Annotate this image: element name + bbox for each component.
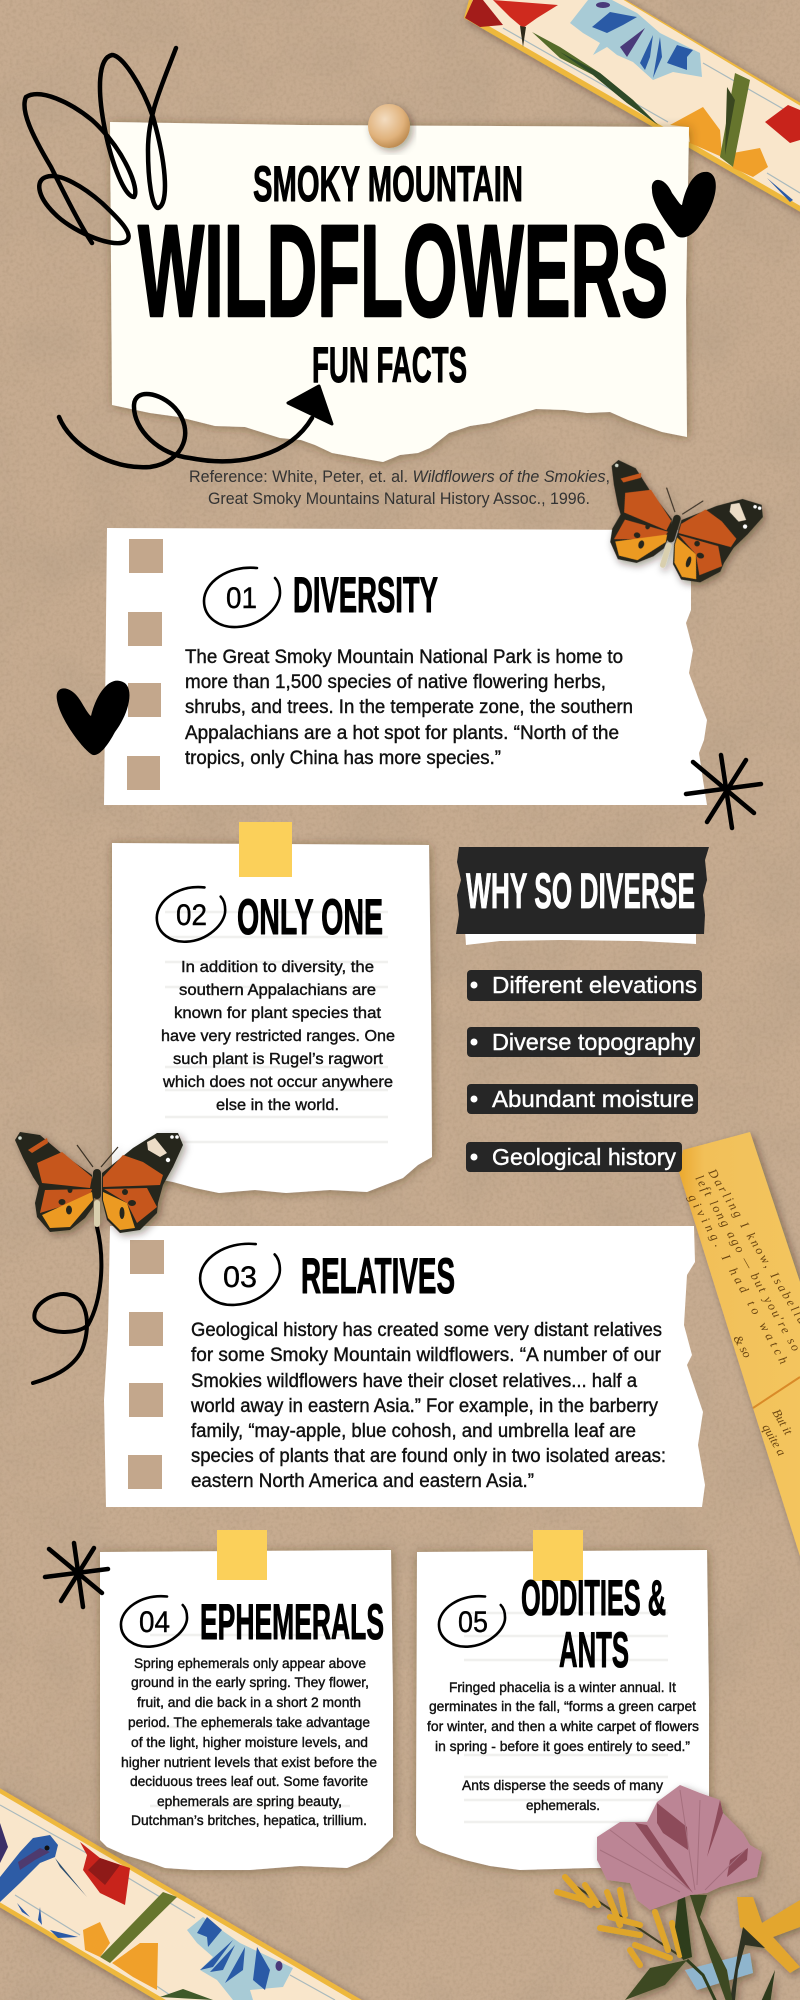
butterfly: top right [586, 459, 766, 597]
number badge 02 [157, 887, 225, 942]
panel: 02 only one [112, 822, 432, 1193]
title paper card [110, 122, 689, 462]
washi tape: top right floral [464, 0, 800, 214]
title: smoky mountain: SMOKY MOUNTAIN [253, 156, 523, 212]
body text 04: higher nutrient levels that exist before the [121, 1754, 377, 1770]
heading: ephemerals: EPHEMERALS [200, 1594, 384, 1650]
heading: only one: ONLY ONE [237, 889, 383, 945]
number badge 02: 02 [176, 899, 207, 932]
body text 04: of the light, higher moisture levels, and [131, 1734, 368, 1750]
arrow: looped arrow to fun facts [59, 386, 332, 467]
body text 01: Appalachians are a hot spot for plants. “North of the [185, 723, 619, 744]
heading: relatives: RELATIVES [301, 1248, 455, 1304]
number badge 04 [121, 1596, 187, 1647]
body text 01: shrubs, and trees. In the temperate zone, the southern [185, 697, 633, 718]
body text 04: ground in the early spring. They flower, [131, 1674, 369, 1690]
icon: asterisk left [45, 1543, 108, 1607]
yellow handwritten letter strip: giving. I had to watch [685, 1192, 791, 1366]
body text 03 [190, 1320, 666, 1492]
yellow handwritten letter strip: left long ago — but you're so [692, 1173, 800, 1354]
yellow note tab [533, 1530, 583, 1581]
reference citation line 2: Great Smoky Mountains Natural History Assoc., 1996. [208, 490, 590, 508]
body text 04: ephemerals are spring beauty, [157, 1793, 342, 1809]
body text 04: Dutchman’s britches, hepatica, trillium. [131, 1812, 367, 1828]
number badge 05 [439, 1596, 505, 1647]
number badge 01 [204, 568, 280, 627]
body text 02: southern Appalachians are [179, 982, 376, 999]
body text 05: Fringed phacelia is a winter annual. It [449, 1679, 676, 1695]
brass pin [368, 104, 410, 148]
botanical: pink flower bouquet [557, 1785, 800, 2000]
heading: ants: ANTS [559, 1622, 629, 1678]
bullet: different elevations: Different elevations [492, 972, 697, 998]
subtitle: fun facts: FUN FACTS [312, 337, 467, 393]
body text 02: In addition to diversity, the [181, 959, 374, 976]
body text 04 [121, 1655, 377, 1828]
number badge 05: 05 [458, 1606, 488, 1639]
body text 02: such plant is Rugel’s ragwort [173, 1051, 384, 1068]
body text 03: species of plants that are found only in two isolated areas: [191, 1446, 666, 1467]
icon: asterisk right [686, 755, 761, 828]
body text 01 [185, 647, 633, 769]
string from butterfly [33, 1227, 101, 1383]
yellow handwritten letter strip [679, 1132, 800, 1575]
body text 01: more than 1,500 species of native flowering herbs, [185, 672, 606, 693]
bullet: abundant moisture: Abundant moisture [492, 1086, 694, 1112]
panel: 01 diversity [104, 528, 707, 805]
body text 04: deciduous trees leaf out. Some favorite [130, 1773, 368, 1789]
body text 04: fruit, and die back in a short 2 month [137, 1694, 361, 1710]
body text 05: germinates in the fall, “forms a green carpet [429, 1698, 696, 1714]
body text 02: known for plant species that [174, 1005, 382, 1022]
panel: why so diverse banner [456, 847, 709, 945]
body text 01: tropics, only China has more species.” [185, 748, 501, 769]
yellow handwritten letter strip: & so [730, 1332, 755, 1360]
butterfly: left [15, 1132, 183, 1233]
reference citation: Reference: White, Peter, et. al. Wildflowers of the Smokies, [189, 468, 610, 486]
washi tape: bottom left floral [0, 1786, 372, 2000]
body text 05: Ants disperse the seeds of many [462, 1777, 663, 1793]
heading: oddities &: ODDITIES & [521, 1570, 666, 1626]
body text 02: have very restricted ranges. One [161, 1028, 395, 1045]
yellow handwritten letter strip: But it [769, 1406, 796, 1438]
body text 05 [427, 1679, 699, 1813]
icon: heart top right [652, 172, 716, 238]
body text 04: Spring ephemerals only appear above [134, 1655, 366, 1671]
body text 03: world away in eastern Asia.” For example, in the barberry [190, 1396, 658, 1417]
body text 05: for winter, and then a white carpet of flowers [427, 1718, 699, 1734]
body text 02: else in the world. [216, 1097, 339, 1114]
panel: 04 ephemerals [100, 1530, 393, 1870]
panel: 03 relatives [104, 1226, 705, 1507]
body text 01: The Great Smoky Mountain National Park is home to [185, 647, 623, 668]
number badge 04: 04 [139, 1606, 170, 1639]
body text 05: ephemerals. [526, 1797, 600, 1813]
body text 03: family, “may-apple, blue cohosh, and umbrella leaf are [191, 1421, 636, 1442]
body text 03: for some Smoky Mountain wildflowers. “A number of our [191, 1345, 662, 1366]
yellow note tab [217, 1530, 267, 1580]
bullet: diverse topography: Diverse topography [492, 1029, 695, 1055]
number badge 03 [200, 1244, 280, 1305]
body text 04: period. The ephemerals take advantage [128, 1714, 370, 1730]
body text 02 [161, 959, 395, 1114]
bullet: geological history: Geological history [492, 1144, 677, 1170]
heading: diversity: DIVERSITY [293, 567, 438, 623]
number badge 03: 03 [223, 1261, 257, 1294]
body text 02: which does not occur anywhere [162, 1074, 393, 1091]
body text 03: Geological history has created some very distant relatives [191, 1320, 662, 1341]
body text 03: Smokies wildflowers have their closet relatives... half a [191, 1371, 637, 1392]
yellow handwritten letter strip: quite a [759, 1422, 789, 1458]
number badge 01: 01 [226, 582, 257, 615]
yellow note tab [239, 822, 292, 877]
icon: heart left [57, 681, 129, 755]
panel: 05 oddities and ants [416, 1530, 709, 1870]
scribble: top left loops [24, 48, 176, 243]
body text 03: eastern North America and eastern Asia.” [191, 1471, 534, 1492]
body text 05: in spring - before it goes entirely to seed.” [435, 1738, 690, 1754]
